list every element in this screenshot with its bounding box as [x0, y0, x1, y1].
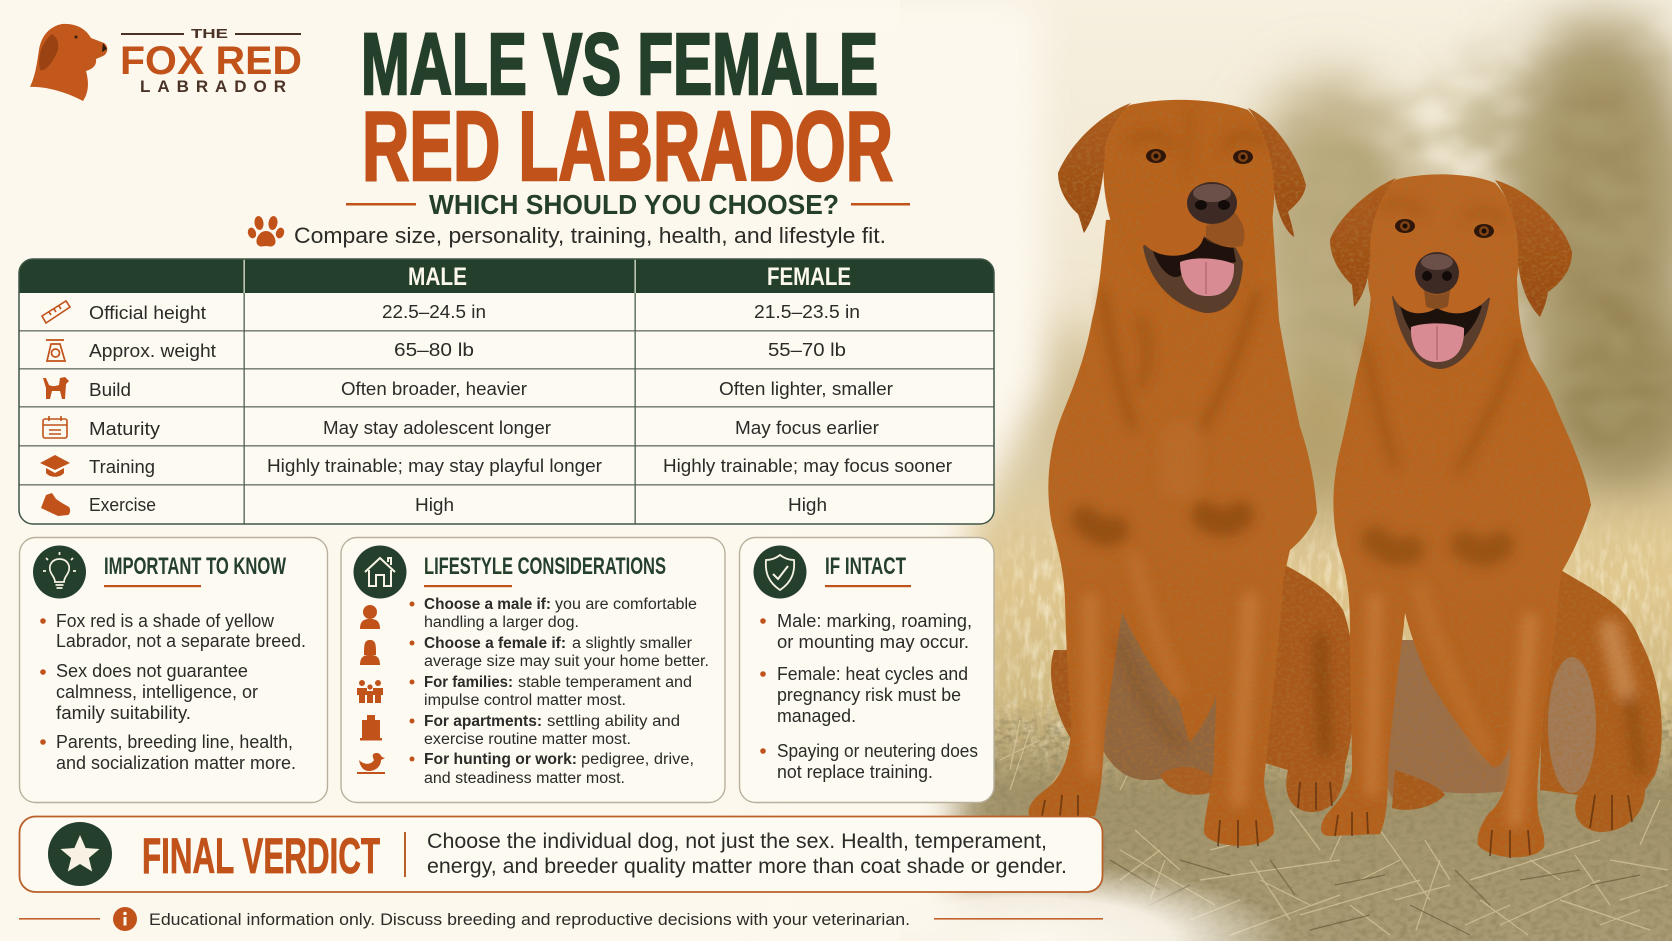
- verdict text: [427, 830, 1067, 878]
- icon: star: [48, 822, 112, 886]
- verdict text: Choose the individual dog, not just the sex. Health, temperament,: [427, 830, 1047, 853]
- icon: paw: [246, 215, 286, 246]
- rear haunch: [1540, 560, 1662, 832]
- bullet list: Spaying or neutering does: [777, 741, 978, 761]
- female jowl: [1392, 250, 1490, 313]
- row: official height: Official height: [89, 303, 206, 323]
- bullet list: managed.: [777, 706, 856, 726]
- bullet list: Fox red is a shade of yellow: [56, 611, 275, 631]
- female paws: [1335, 795, 1632, 858]
- bullet list: calmness, intelligence, or: [56, 682, 258, 702]
- grass texture: [960, 730, 1672, 941]
- bullet list: [410, 596, 709, 787]
- verdict heading: FINAL VERDICT: [142, 828, 380, 884]
- bullet list: you are comfortable: [555, 596, 697, 613]
- male fur shading: [1085, 110, 1325, 800]
- row: approx weight: [89, 340, 846, 361]
- title: [361, 16, 893, 201]
- left and lower photo fades: [900, 2, 1066, 931]
- icon: lightbulb: [33, 546, 86, 598]
- bullet list: Labrador, not a separate breed.: [56, 631, 306, 651]
- bullet list: Male: marking, roaming,: [777, 611, 972, 631]
- rear haunch: [1255, 560, 1355, 812]
- bullet list: a slightly smaller: [572, 635, 692, 652]
- row: exercise: High: [415, 495, 454, 515]
- row: maturity: May focus earlier: [735, 418, 879, 438]
- female head: [1367, 174, 1519, 368]
- bullet list: Sex does not guarantee: [56, 661, 248, 681]
- panel: important to know: [20, 538, 328, 802]
- male ears: [1058, 103, 1131, 233]
- bullet list: impulse control matter most.: [424, 692, 626, 709]
- row: approx weight: 55–70 lb: [768, 340, 846, 360]
- male tongue: [1180, 258, 1234, 296]
- bullet list: Choose a male if:: [424, 596, 551, 613]
- table header: MALE: [408, 263, 467, 291]
- icon: duck: [357, 753, 385, 774]
- bullet list: exercise routine matter most.: [424, 731, 631, 748]
- icon: shield: [754, 546, 806, 598]
- bullet list: average size may suit your home better.: [424, 653, 709, 670]
- bullet list: [760, 611, 978, 782]
- row: training: [89, 456, 952, 477]
- body: [1029, 210, 1317, 846]
- icon: family: [357, 680, 383, 703]
- male nose: [1187, 182, 1237, 224]
- bullet list: and socialization matter more.: [56, 753, 296, 773]
- belly: [1100, 610, 1230, 787]
- row: training: Highly trainable; may focus sooner: [663, 456, 952, 476]
- logo wordmark: LABRADOR: [140, 77, 286, 96]
- bullet list: handling a larger dog.: [424, 614, 579, 631]
- bullet list: pregnancy risk must be: [777, 685, 961, 705]
- disclaimer: [19, 907, 1103, 931]
- female ears: [1330, 178, 1396, 307]
- icon: building: [360, 715, 382, 740]
- male eyes: [1146, 149, 1166, 163]
- row: maturity: [89, 418, 879, 439]
- bullet list: or mounting may occur.: [777, 632, 969, 652]
- photo: female dog: [1321, 174, 1662, 858]
- row: training: Highly trainable; may stay playful longer: [267, 456, 602, 476]
- bullet list: family suitability.: [56, 703, 191, 723]
- icon: dog: [43, 377, 69, 399]
- row: exercise: Exercise: [89, 495, 156, 515]
- bullet list: [40, 611, 306, 773]
- bullet list: settling ability and: [547, 713, 680, 730]
- heading: [825, 553, 911, 587]
- logo wordmark: THE: [191, 26, 228, 41]
- row: exercise: High: [788, 495, 827, 515]
- bullet list: Choose a female if:: [424, 635, 566, 652]
- female nose: [1415, 252, 1459, 294]
- table header: FEMALE: [767, 263, 851, 291]
- row: official height: 21.5–23.5 in: [754, 302, 860, 322]
- bullet list: For families:: [424, 674, 513, 691]
- heading: IF INTACT: [825, 553, 906, 580]
- row: build: Often broader, heavier: [341, 379, 527, 399]
- female fur shading: [1365, 203, 1640, 820]
- photo: male dog: [1029, 100, 1355, 848]
- bullet list: For apartments:: [424, 713, 542, 730]
- row: build: [89, 379, 893, 400]
- logo wordmark: [120, 26, 302, 96]
- icon: woman: [360, 640, 380, 665]
- icon: info: [113, 907, 137, 931]
- icon: ruler: [42, 301, 70, 323]
- field speckle: [1000, 540, 1672, 750]
- icon: scale: [46, 340, 65, 361]
- panel: if intact: [740, 538, 994, 802]
- final verdict banner: [20, 816, 1102, 892]
- background photo: blurred autumn field: [932, 0, 1672, 941]
- bullet list: stable temperament and: [518, 674, 692, 691]
- bullet list: Parents, breeding line, health,: [56, 732, 293, 752]
- heading: IMPORTANT TO KNOW: [104, 553, 286, 580]
- bullet list: For hunting or work:: [424, 751, 577, 768]
- icon: house: [354, 546, 406, 598]
- title: RED LABRADOR: [362, 91, 893, 201]
- grass stalks: [1000, 720, 1668, 935]
- row: training: Training: [89, 457, 155, 477]
- logo dog head: [30, 24, 107, 101]
- title: MALE VS FEMALE: [361, 16, 878, 113]
- logo wordmark: FOX RED: [120, 39, 302, 83]
- male head: [1104, 100, 1274, 312]
- female tongue: [1411, 323, 1464, 362]
- female mouth: [1392, 219, 1494, 369]
- row: official height: 22.5–24.5 in: [382, 302, 486, 322]
- body: [1321, 260, 1591, 857]
- verdict text: energy, and breeder quality matter more than coat shade or gender.: [427, 855, 1067, 878]
- row: build: Build: [89, 380, 131, 400]
- belly: [1382, 640, 1520, 800]
- male jowl: [1140, 190, 1246, 256]
- tagline: Compare size, personality, training, health, and lifestyle fit.: [294, 223, 886, 248]
- table header: [408, 263, 851, 291]
- male mouth: [1140, 149, 1253, 313]
- row: approx weight: Approx. weight: [89, 341, 216, 361]
- row: approx weight: 65–80 lb: [394, 340, 474, 360]
- tree foliage mottling: [1337, 17, 1672, 431]
- female eyes: [1395, 219, 1415, 233]
- bullet list: Female: heat cycles and: [777, 664, 968, 684]
- panel: lifestyle considerations: [341, 538, 725, 802]
- male paws: [1042, 782, 1332, 848]
- subtitle: WHICH SHOULD YOU CHOOSE?: [429, 189, 839, 220]
- disclaimer: Educational information only. Discuss breeding and reproductive decisions with your veterinarian.: [149, 910, 910, 929]
- bullet list: pedigree, drive,: [581, 751, 694, 768]
- icon: graduation cap: [40, 455, 70, 477]
- row: maturity: May stay adolescent longer: [323, 418, 551, 438]
- icon: calendar: [43, 416, 67, 438]
- row: build: Often lighter, smaller: [719, 379, 893, 399]
- row: maturity: Maturity: [89, 419, 160, 439]
- icon: shoe: [41, 493, 70, 516]
- bullet list: and steadiness matter most.: [424, 770, 625, 787]
- icon: person: [360, 605, 380, 629]
- row: exercise: [89, 495, 827, 515]
- heading: LIFESTYLE CONSIDERATIONS: [424, 553, 666, 580]
- logo: [30, 24, 302, 101]
- comparison table: [19, 259, 994, 524]
- bullet list: not replace training.: [777, 762, 933, 782]
- row: official height: [89, 302, 860, 323]
